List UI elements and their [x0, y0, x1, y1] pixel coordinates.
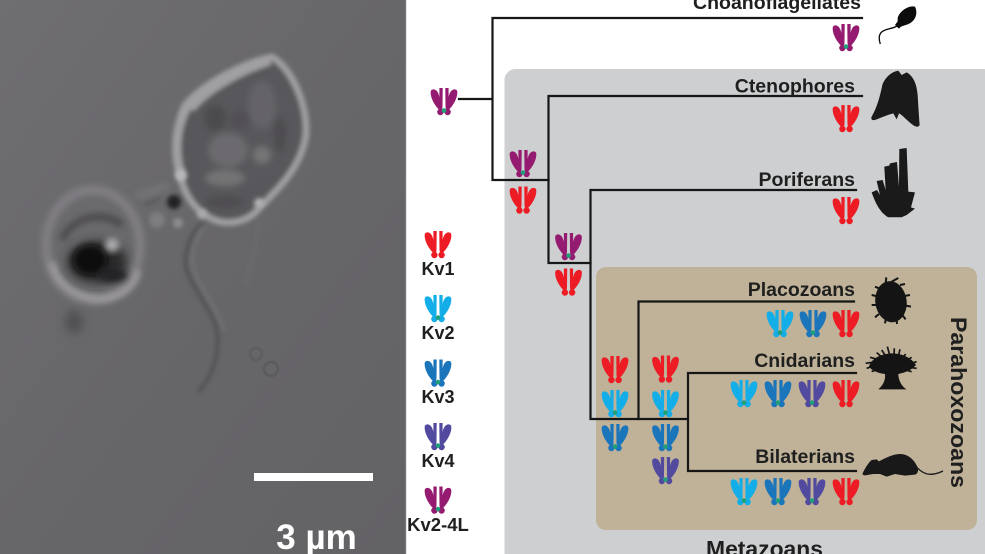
scale bar — [254, 473, 373, 481]
icon: placozoan — [872, 277, 911, 324]
clade: bilaterians: Bilaterians — [755, 446, 855, 468]
phylogenetic tree lines — [459, 18, 862, 471]
panel: metazoans — [504, 69, 985, 554]
clade: cnidarians: Cnidarians — [754, 350, 855, 372]
cell: collar and neck — [135, 169, 264, 228]
clade: bilaterians — [731, 446, 943, 505]
legend: Kv2: Kv2 — [421, 323, 455, 343]
node channels: metazoan ancestor — [510, 150, 536, 214]
legend: Kv1 — [421, 231, 455, 279]
label: Parahoxozoans: Parahoxozoans — [946, 317, 971, 488]
legend — [407, 231, 469, 535]
legend: Kv4: Kv4 — [421, 451, 455, 471]
icon: ctenophore — [871, 71, 920, 127]
legend: Kv2 — [421, 295, 455, 343]
legend: Kv3: Kv3 — [421, 387, 455, 407]
clade: ctenophores: Ctenophores — [735, 76, 855, 98]
clade: poriferans: Poriferans — [759, 169, 855, 191]
legend: Kv4 — [421, 423, 455, 471]
flagellum — [186, 222, 257, 392]
clade: poriferans — [759, 148, 915, 224]
icon: sea anemone — [866, 347, 917, 389]
icon: sponge — [872, 148, 915, 217]
cell: interior granules — [204, 81, 286, 209]
legend: Kv1: Kv1 — [421, 259, 455, 279]
panel: parahoxozoans — [596, 267, 977, 530]
clade: choanoflagellates — [693, 0, 916, 51]
legend: Kv2-4L: Kv2-4L — [407, 514, 469, 535]
clade: cnidarians — [731, 347, 917, 407]
cell: halo around body — [176, 57, 306, 223]
node channels: parahoxozoan ancestor — [602, 356, 628, 451]
icon: choanoflagellate — [879, 6, 916, 44]
prey particle with dark core — [46, 190, 278, 376]
clade: placozoans — [748, 277, 911, 337]
icon: rat — [863, 454, 943, 477]
legend: Kv3 — [421, 360, 455, 407]
legend: Kv2-4L — [407, 486, 469, 535]
clade: placozoans: Placozoans — [748, 279, 855, 301]
clade: ctenophores — [735, 71, 920, 132]
root ancestral channel — [431, 88, 457, 115]
node channels: cnidarian bilaterian ancestor — [652, 356, 679, 484]
node channels: sponge divergence — [555, 233, 582, 296]
panel: micrograph of choanoflagellate — [0, 0, 406, 554]
